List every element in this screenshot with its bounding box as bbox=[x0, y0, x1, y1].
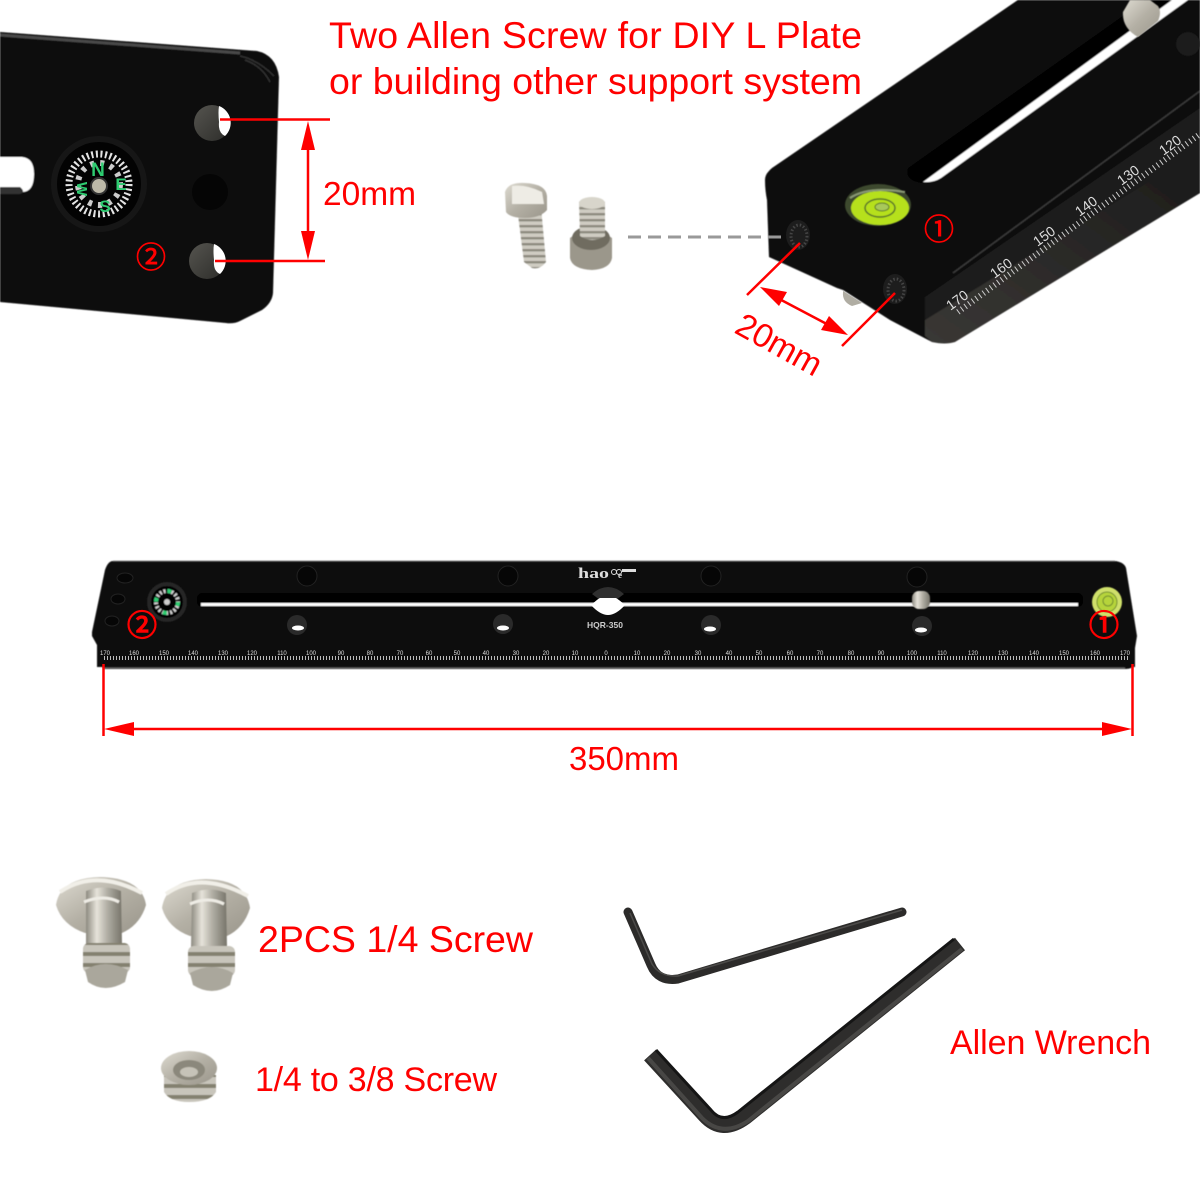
icon: adapter ring bbox=[161, 1051, 217, 1102]
ruler scale bbox=[100, 651, 1131, 658]
ruler scale: 130 bbox=[998, 651, 1009, 657]
title bbox=[329, 14, 862, 102]
icon: compass: E bbox=[115, 175, 127, 194]
ruler scale: 50 bbox=[756, 651, 763, 657]
icon: small compass bbox=[147, 582, 187, 622]
dimension: 20mm angled: 20mm bbox=[729, 307, 828, 384]
ruler scale: 170 bbox=[1120, 651, 1131, 657]
ruler scale: 140 bbox=[1029, 651, 1040, 657]
icon: large wrench bbox=[648, 939, 962, 1129]
mounting holes bbox=[189, 105, 231, 279]
icon: small wrench bbox=[628, 910, 902, 979]
ruler scale: 60 bbox=[426, 651, 433, 657]
slot bbox=[907, 0, 1188, 183]
ruler scale: 50 bbox=[454, 651, 461, 657]
dimension: 20mm angled bbox=[729, 243, 895, 384]
label: circled 2: ② bbox=[136, 233, 166, 277]
ruler scale: 160 bbox=[1090, 651, 1101, 657]
panel: two allen screws bbox=[505, 183, 612, 270]
ruler scale: 20 bbox=[664, 651, 671, 657]
ruler scale: 130 bbox=[1114, 161, 1142, 188]
ruler scale: 10 bbox=[572, 651, 579, 657]
bottom row holes bbox=[287, 614, 932, 636]
title: Two Allen Screw for DIY L Plate bbox=[329, 14, 862, 56]
ruler scale: 110 bbox=[937, 651, 947, 657]
ruler scale: 160 bbox=[129, 651, 140, 657]
ruler scale: 120 bbox=[968, 651, 979, 657]
ruler scale: 60 bbox=[787, 651, 794, 657]
ruler scale: 20 bbox=[543, 651, 550, 657]
icon: compass: W bbox=[73, 182, 90, 197]
dashed guide line bbox=[628, 236, 786, 238]
ruler scale: 30 bbox=[513, 651, 520, 657]
ruler scale: 0 bbox=[604, 651, 608, 657]
ruler scale: 40 bbox=[726, 651, 733, 657]
plate body bbox=[0, 32, 279, 323]
slot screw bbox=[1123, 0, 1200, 56]
panel: level end of plate bbox=[729, 0, 1200, 384]
brand logo: e bbox=[618, 570, 622, 580]
ruler scale: 120 bbox=[247, 651, 258, 657]
ruler scale: 140 bbox=[1072, 192, 1100, 219]
label: allen wrench: Allen Wrench bbox=[950, 1024, 1151, 1062]
icon: compass bbox=[51, 136, 147, 232]
ruler scale: 40 bbox=[483, 651, 490, 657]
plate body bbox=[92, 561, 1137, 669]
ruler scale: 160 bbox=[987, 254, 1015, 281]
panel: full plate bbox=[92, 561, 1137, 777]
threaded holes bbox=[786, 220, 907, 306]
icon: compass: N bbox=[91, 160, 105, 181]
label: circled 1: ① bbox=[1089, 601, 1119, 645]
keyhole bbox=[591, 587, 625, 615]
ruler scale: 150 bbox=[1030, 222, 1058, 249]
ruler scale: 100 bbox=[306, 651, 317, 657]
model number: HQR-350 bbox=[587, 620, 623, 630]
icon: screw two bbox=[162, 879, 250, 991]
plate body bbox=[765, 0, 1200, 344]
panel: quarter-inch screws bbox=[56, 877, 534, 991]
ruler scale: 80 bbox=[848, 651, 855, 657]
dimension: 20mm vertical bbox=[215, 120, 416, 261]
panel: allen wrenches bbox=[628, 910, 1151, 1129]
ruler scale: 110 bbox=[277, 651, 287, 657]
brand logo: hao bbox=[578, 566, 609, 582]
top row holes bbox=[105, 566, 927, 626]
title: or building other support system bbox=[329, 60, 862, 102]
icon: screw one bbox=[56, 877, 146, 988]
label: circled 1: ① bbox=[924, 205, 954, 249]
icon: compass: S bbox=[99, 197, 111, 216]
ruler scale: 100 bbox=[907, 651, 918, 657]
ruler scale: 30 bbox=[695, 651, 702, 657]
dimension: 350mm: 350mm bbox=[569, 740, 679, 777]
icon: small bubble level bbox=[1092, 587, 1122, 617]
ruler scale: 70 bbox=[817, 651, 824, 657]
ruler scale: 10 bbox=[634, 651, 641, 657]
icon: screw one bbox=[505, 183, 547, 268]
ruler scale: 80 bbox=[367, 651, 374, 657]
ruler scale: 170 bbox=[100, 651, 111, 657]
ruler scale: 150 bbox=[159, 651, 170, 657]
panel: compass end of plate bbox=[0, 32, 416, 323]
ruler scale: 140 bbox=[188, 651, 199, 657]
ruler scale: 120 bbox=[1156, 131, 1184, 158]
dimension: 350mm bbox=[104, 664, 1132, 777]
dimension: 20mm vertical: 20mm bbox=[323, 176, 416, 213]
ruler scale: 90 bbox=[878, 651, 885, 657]
ruler scale bbox=[943, 131, 1200, 313]
panel: adapter screw bbox=[161, 1051, 497, 1102]
ruler scale: 150 bbox=[1059, 651, 1070, 657]
ruler scale: 130 bbox=[218, 651, 229, 657]
brand logo bbox=[578, 566, 636, 582]
icon: bubble level bbox=[845, 184, 911, 226]
label: adapter screw: 1/4 to 3/8 Screw bbox=[255, 1061, 497, 1099]
ruler scale: 70 bbox=[397, 651, 404, 657]
label: 2pcs screw: 2PCS 1/4 Screw bbox=[258, 918, 534, 960]
label: circled 2: ② bbox=[127, 601, 157, 645]
slot thumb screw bbox=[912, 591, 930, 609]
ruler scale: 90 bbox=[338, 651, 345, 657]
icon: screw two bbox=[570, 197, 612, 270]
ruler scale: 170 bbox=[943, 286, 971, 313]
